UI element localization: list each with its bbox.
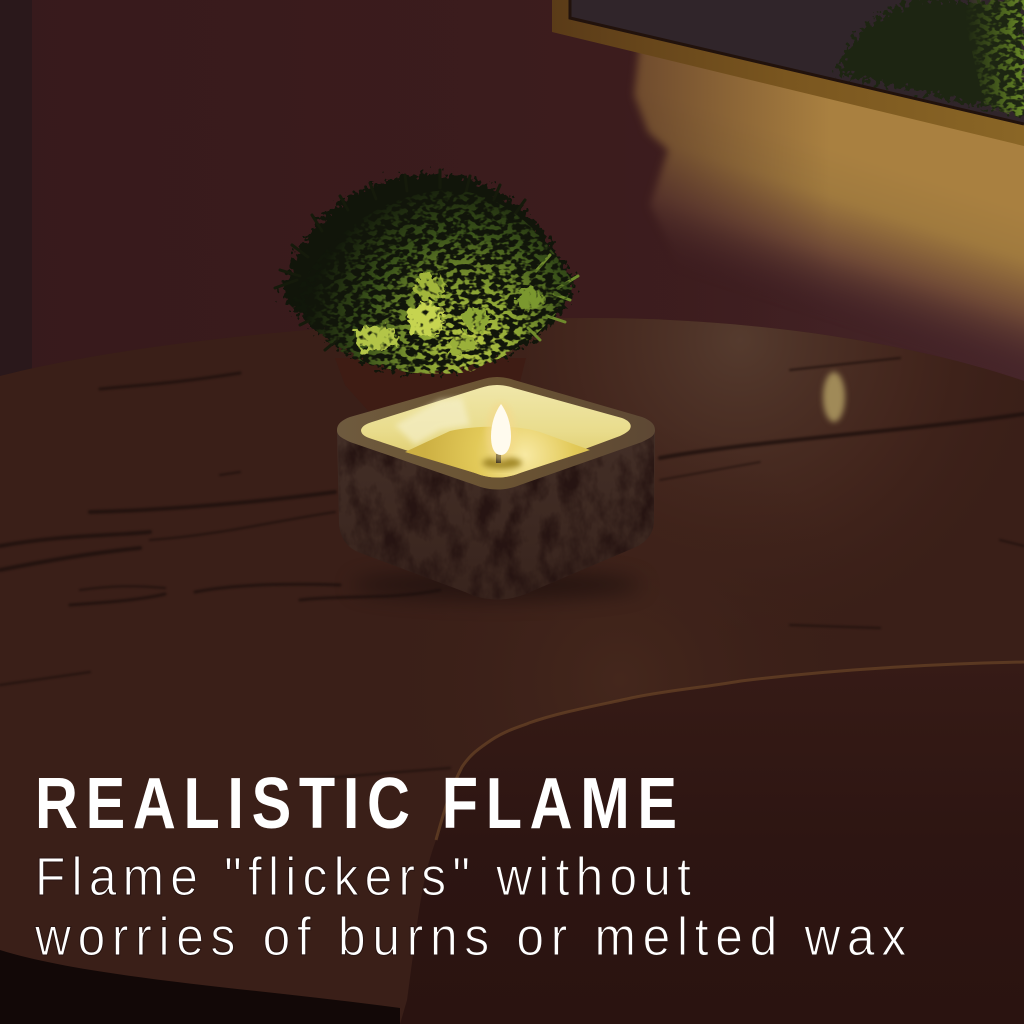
- bright flower clusters: [354, 274, 544, 355]
- description line 1: Flame "flickers" without: [35, 846, 692, 906]
- foliage highlights: [290, 190, 574, 374]
- marble table: [0, 318, 1024, 1024]
- candle stone body: [337, 377, 655, 600]
- lit wall area with shadow edge: [620, 30, 1024, 400]
- candle rim: [337, 377, 655, 490]
- wall background: [0, 0, 1024, 400]
- foliage mass: [282, 174, 576, 373]
- marble veins: [0, 358, 1024, 780]
- leaf sprigs around silhouette: [275, 170, 525, 350]
- heading: REALISTIC FLAME: [35, 763, 677, 844]
- plant: [275, 170, 578, 415]
- chair back: [400, 662, 1024, 1024]
- plant pot: [335, 358, 526, 415]
- table edge shadow at bottom left: [0, 950, 400, 1024]
- chair edge highlight: [436, 662, 1024, 840]
- stone texture: [338, 432, 654, 600]
- mirror frame: [552, 0, 1024, 146]
- wall mirror: [552, 0, 1024, 146]
- description line 2: worries of burns or melted wax: [34, 906, 906, 966]
- wall highlights: [395, 398, 470, 445]
- wax pool: [405, 427, 590, 478]
- wick shadow: [482, 457, 522, 469]
- candle inner wall: [361, 385, 631, 478]
- mirror frame inner shadow line: [570, 0, 1024, 124]
- reflected plant: [838, 0, 1024, 118]
- table reflection of flame: [823, 372, 845, 422]
- flame: [491, 404, 511, 455]
- caption text: [34, 763, 906, 966]
- candle shadow: [352, 571, 642, 599]
- green leaf tips on right side: [528, 255, 578, 340]
- candle: [337, 377, 655, 600]
- mirror glass: [570, 0, 1024, 124]
- wick: [496, 454, 501, 463]
- flame glow: [486, 402, 516, 462]
